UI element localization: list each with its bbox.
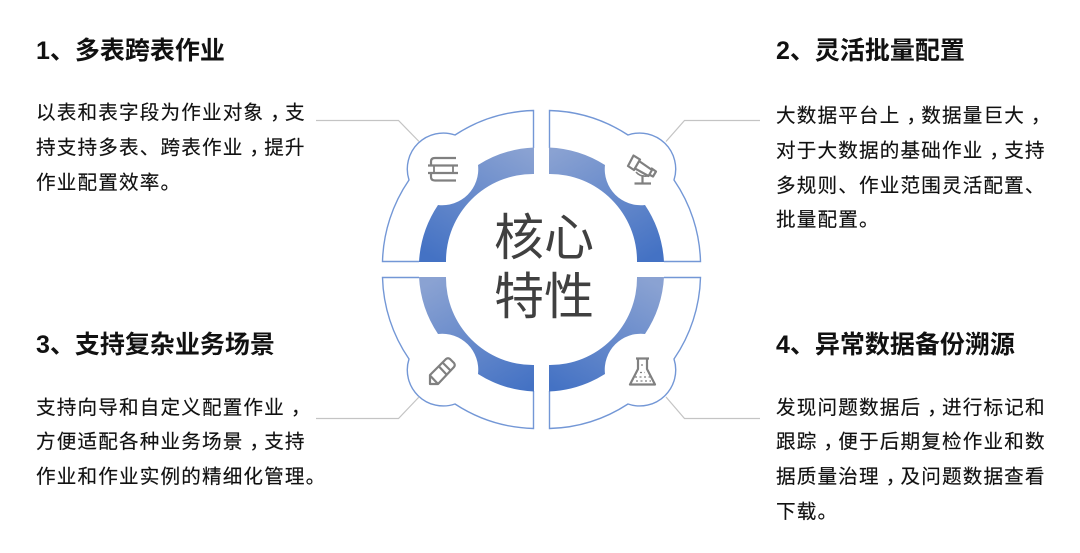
heading 3: 3、支持复杂业务场景 [36,331,275,359]
text 3: 支持向导和自定义配置作业 ， [36,396,312,418]
icon: telescope [628,156,656,184]
text 1: 作业配置效率。 [36,172,181,194]
icon: flask [630,358,655,384]
text 1: 以表和表字段为作业对象 ，支 [36,102,306,124]
center title: 核心 [494,210,594,266]
center title: 特性 [494,269,594,325]
quadrant: bottom right [549,277,760,428]
text 2: 大数据平台上 ，数据量巨大 ， [776,105,1052,127]
heading 1: 1、多表跨表作业 [36,37,225,65]
text 4: 发现问题数据后 ，进行标记和 [776,396,1046,418]
text 3: 方便适配各种业务场景 ，支持 [36,431,306,453]
panel: feature 4 [776,331,1046,523]
panel: feature 2 [776,37,1052,231]
text 2: 批量配置。 [776,209,880,231]
heading 2: 2、灵活批量配置 [776,37,965,65]
panel: feature 3 [36,331,326,488]
text 4 [776,396,1046,523]
quadrant: top right [549,110,760,262]
center title [494,210,594,325]
text 1 [36,102,306,194]
quadrant: bottom left [316,277,534,428]
text 4: 据质量治理 ，及问题数据查看 [776,466,1046,488]
text 2: 多规则、作业范围灵活配置、 [776,175,1046,197]
icon: books [428,158,458,180]
text 4: 下载。 [776,501,838,523]
quadrant: top left [316,110,534,262]
text 2: 对于大数据的基础作业 ，支持 [776,140,1046,162]
icon: pencil [430,358,455,384]
text 2 [776,105,1052,231]
heading 4: 4、异常数据备份溯源 [776,331,1015,359]
panel: feature 1 [36,37,306,194]
text 1: 持支持多表、跨表作业 ，提升 [36,137,306,159]
text 3 [36,396,326,488]
text 4: 跟踪 ，便于后期复检作业和数 [776,431,1046,453]
text 3: 作业和作业实例的精细化管理。 [36,466,326,488]
